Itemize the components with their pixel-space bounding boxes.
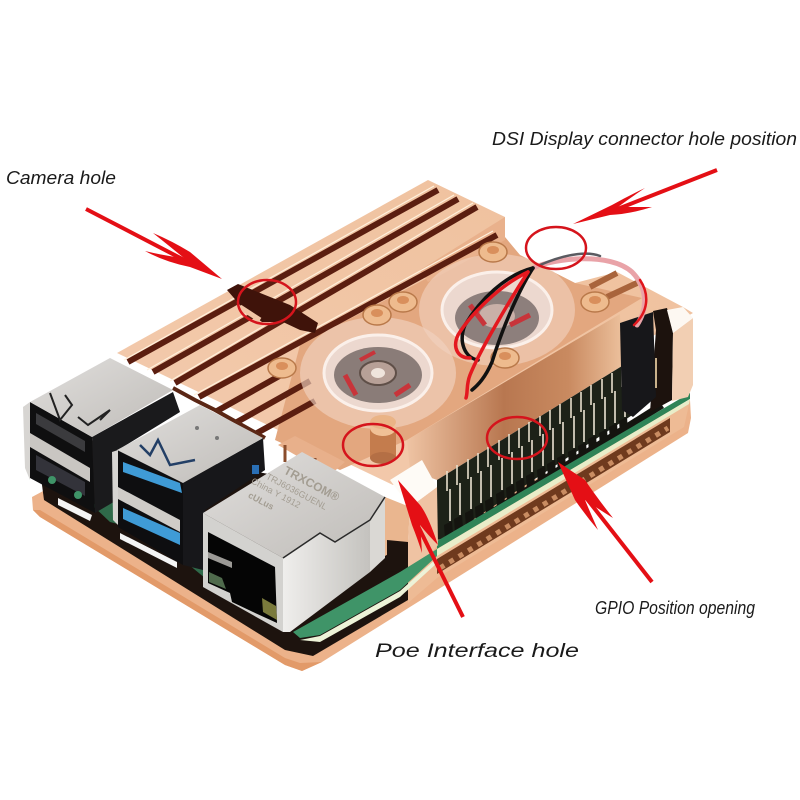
Ethernet jack bbox=[203, 452, 385, 632]
lower fins bbox=[278, 436, 345, 475]
arrow: GPIO opening bbox=[558, 462, 652, 582]
camera slot bbox=[227, 284, 318, 333]
printed marking: TRXCOM® bbox=[282, 463, 342, 504]
GPIO side wall bbox=[407, 314, 622, 480]
USB 3.0 port stack bbox=[112, 405, 265, 570]
printed marking: China Y 1912 bbox=[250, 476, 302, 510]
right side plate with slots bbox=[408, 400, 690, 603]
printed marking: cULus bbox=[247, 490, 276, 512]
green PCB under ethernet bbox=[92, 495, 437, 642]
highlight circle: DSI connector bbox=[526, 227, 586, 269]
GPIO header bbox=[437, 366, 664, 546]
threaded standoff bbox=[370, 428, 396, 458]
highlight circle: GPIO pins bbox=[487, 417, 547, 459]
printed marking: TRJ6036GUENL bbox=[264, 471, 329, 512]
printed marking bbox=[243, 452, 342, 537]
USB 2.0 silver band bbox=[30, 433, 90, 482]
label: camera hole: Camera hole bbox=[6, 168, 116, 188]
heatsink fins with camera slot bbox=[124, 186, 637, 475]
label: GPIO opening: GPIO Position opening bbox=[595, 598, 755, 618]
cooling fan: rear bbox=[419, 254, 575, 366]
fin end shadow bbox=[173, 388, 265, 438]
case top surface bbox=[117, 180, 693, 485]
arrow: DSI display connector bbox=[573, 170, 717, 224]
label: DSI display connector: DSI Display connector hole position bbox=[492, 129, 797, 149]
front corner post bbox=[385, 460, 438, 580]
circuit board edge bbox=[437, 393, 690, 556]
jack opening bbox=[208, 532, 277, 623]
fan recess bbox=[275, 237, 642, 470]
mounting screws bbox=[268, 242, 609, 464]
bottom copper plate bbox=[32, 400, 691, 671]
arrow: Poe interface bbox=[398, 480, 463, 617]
highlight circle: Poe hole bbox=[343, 424, 403, 466]
cooling fan: front bbox=[300, 317, 456, 429]
USB 3.0 blue tongues bbox=[123, 462, 182, 493]
arrow: camera hole bbox=[86, 209, 222, 279]
plate dark inner surface bbox=[40, 440, 408, 656]
USB 2.0 port stack bbox=[23, 358, 180, 521]
dupont connector bbox=[620, 308, 673, 417]
fan wires bbox=[456, 254, 646, 398]
highlight circle: camera hole bbox=[238, 280, 296, 324]
label: Poe interface hole: Poe Interface hole bbox=[375, 641, 579, 662]
right corner post bbox=[667, 307, 693, 401]
